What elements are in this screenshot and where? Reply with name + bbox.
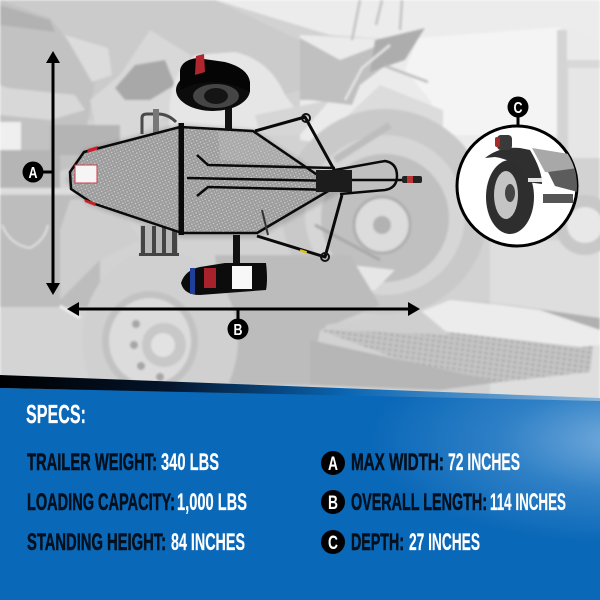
spec list right: C <box>328 533 338 554</box>
axles <box>225 108 232 130</box>
spec list left <box>27 449 247 556</box>
plate shadow <box>66 124 345 238</box>
panel: specs <box>0 375 600 600</box>
spec list left: 1,000 LBS <box>177 489 247 516</box>
spec list left: TRAILER WEIGHT: <box>27 449 157 476</box>
diamond plate deck <box>70 127 335 233</box>
dimension arrow B <box>67 302 420 340</box>
dimension arrow A: A <box>28 165 38 182</box>
right side bike and floor <box>490 240 600 400</box>
hitch <box>402 176 422 183</box>
angled strip <box>0 375 600 401</box>
spec list right: B <box>328 493 338 514</box>
trailer wheel <box>88 284 238 378</box>
bottom wheel and fender <box>181 263 267 295</box>
spec list right: MAX WIDTH: <box>351 449 444 476</box>
spec list left: LOADING CAPACITY: <box>27 489 175 516</box>
sprocket <box>354 197 410 253</box>
spec list right: 27 INCHES <box>409 529 480 556</box>
rear ramp rack <box>139 109 179 256</box>
fender wheel photo <box>485 135 578 234</box>
dimension arrow A <box>22 51 60 295</box>
top wheel and fender <box>176 54 250 111</box>
motorcycle frame and engine <box>90 31 190 120</box>
dimension arrow B: B <box>234 322 242 339</box>
motorcycle rear wheel <box>282 109 488 315</box>
spec list right: 72 INCHES <box>448 449 520 476</box>
motorcycle tail <box>299 38 381 106</box>
spec list right: A <box>328 454 338 475</box>
loading ramp <box>320 330 595 382</box>
front crossbar <box>178 123 184 235</box>
white label <box>75 165 97 183</box>
spec list left: 340 LBS <box>161 449 219 476</box>
trailer, top view <box>66 54 422 295</box>
fuel tank <box>169 52 300 130</box>
spec list left: STANDING HEIGHT: <box>27 529 166 556</box>
deck sheen <box>218 131 300 165</box>
spec list right <box>321 449 566 556</box>
spec list right: OVERALL LENGTH: <box>351 489 487 516</box>
callout C: fender detail <box>457 96 578 246</box>
car at left <box>0 3 92 170</box>
wheel channels and tongue <box>187 155 340 196</box>
outer tow frame <box>255 117 342 257</box>
garage overhang and sky <box>0 0 320 120</box>
spec list left: 84 INCHES <box>171 529 245 556</box>
centre understructure <box>215 255 380 385</box>
spec list right: DEPTH: <box>351 529 404 556</box>
background: greyscale motorcycle photo <box>0 0 600 430</box>
callout C: fender detail: C <box>514 100 523 117</box>
red corner reflectors <box>87 146 98 153</box>
heading: SPECS: <box>26 399 86 429</box>
